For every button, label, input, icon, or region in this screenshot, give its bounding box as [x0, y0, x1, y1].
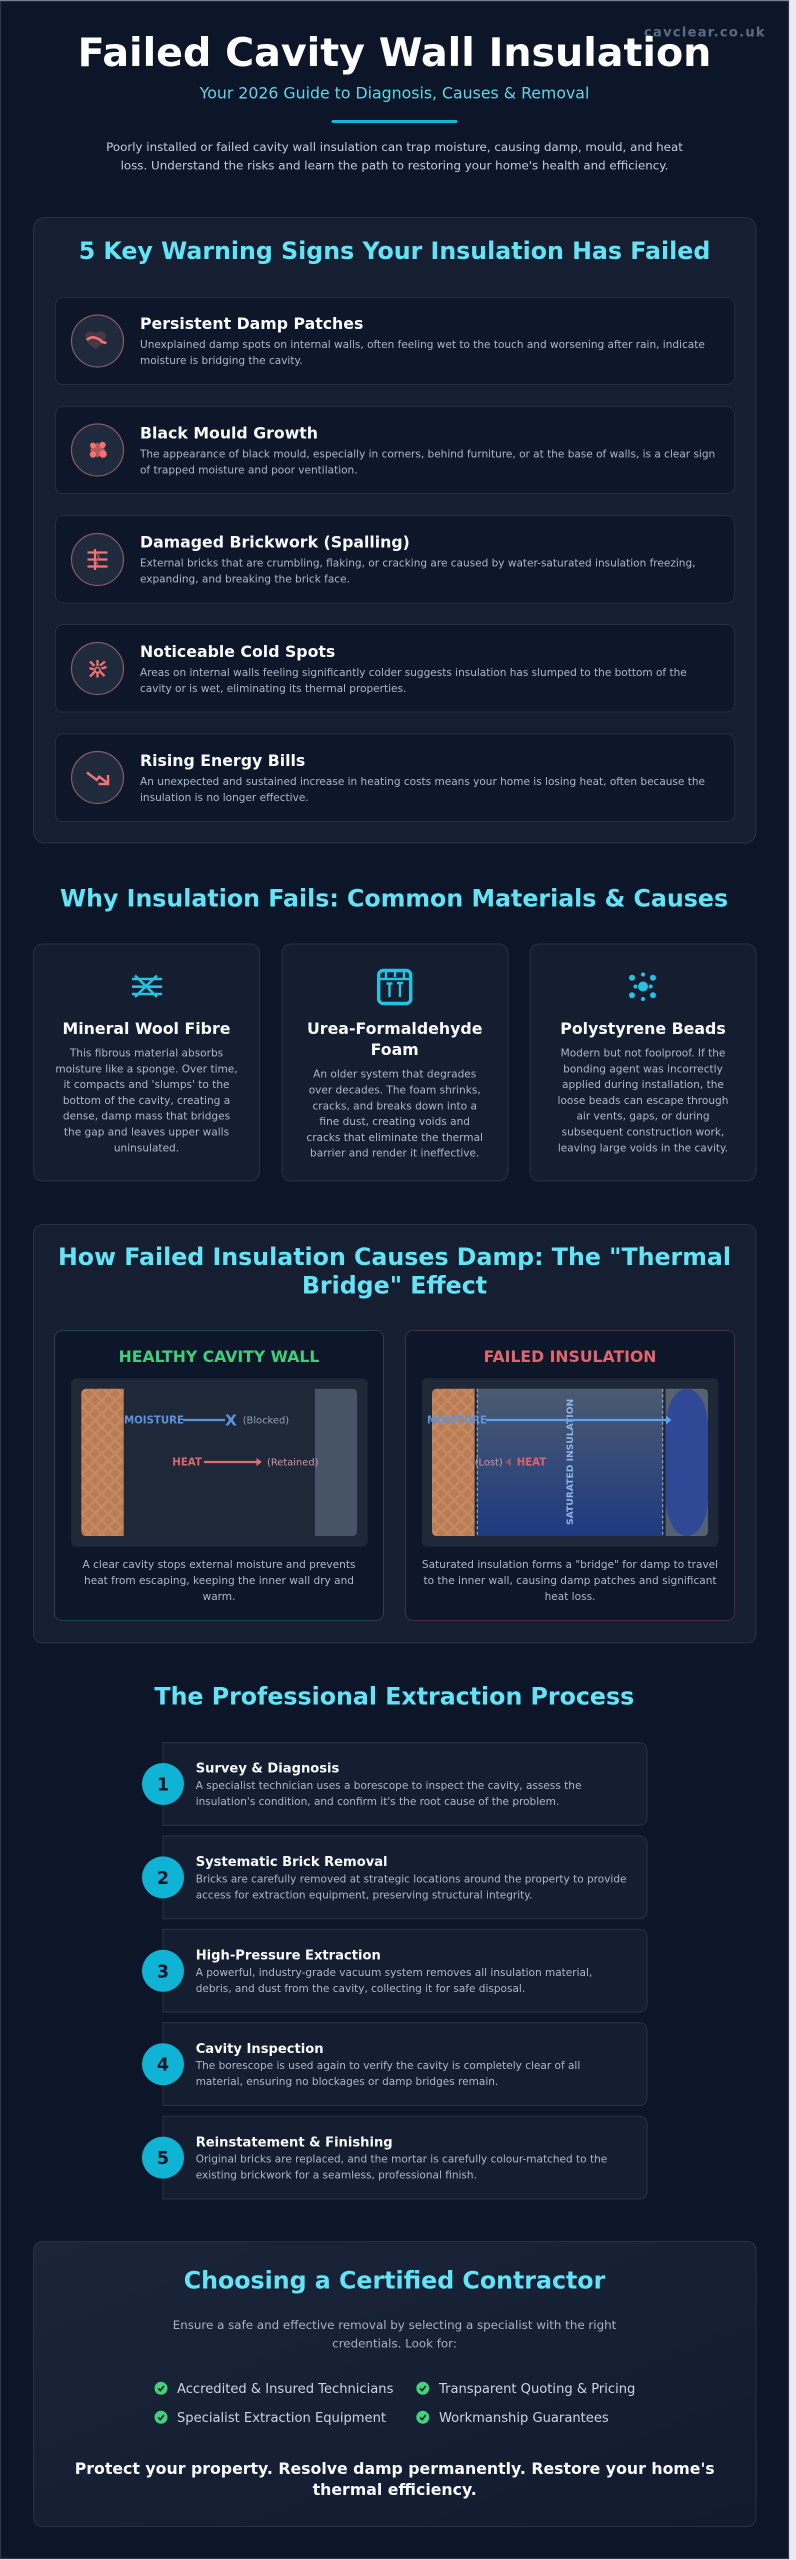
heat retained: HEAT — [172, 1458, 202, 1468]
panel: mineral wool fibre — [34, 944, 260, 1181]
text: mineral wool fibre: This fibrous material absorbs — [69, 1048, 223, 1060]
moisture blocked: X — [225, 1412, 237, 1430]
caption: healthy: warm. — [203, 1591, 235, 1603]
brick wall — [81, 1389, 124, 1536]
number badge 2 — [142, 1856, 184, 1898]
text: polystyrene beads: applied during installation, the — [562, 1079, 724, 1091]
number badge 1: 1 — [157, 1776, 169, 1796]
text: polystyrene beads: air vents, gaps, or during — [576, 1111, 710, 1123]
caption: healthy: heat from escaping, keeping the inner wall dry and — [84, 1575, 354, 1587]
text: urea-formaldehyde foam: Urea-Formaldehyde — [307, 1019, 482, 1038]
text: urea-formaldehyde foam — [306, 1019, 483, 1160]
text: step 5: Reinstatement & Finishing — [196, 2135, 393, 2150]
panel: warning signs — [34, 218, 756, 843]
heading: contractor: Choosing a Certified Contractor — [184, 2266, 606, 2294]
heat lost: HEAT — [517, 1458, 546, 1468]
saturated insulation — [477, 1389, 663, 1536]
step 2: Bricks are carefully removed at strategic locations around the property to provide — [196, 1873, 627, 1885]
panel: thermal bridge — [34, 1224, 756, 1643]
heat lost: (Lost) — [475, 1458, 503, 1468]
moisture passes: MOISTURE — [427, 1416, 487, 1426]
text: polystyrene beads — [558, 1019, 728, 1154]
panel: polystyrene beads — [530, 944, 756, 1181]
step 4: material, ensuring no blockages or damp bridges remain. — [196, 2076, 498, 2088]
card: cold spots: cavity or is wet, eliminating its thermal properties. — [140, 683, 406, 695]
card: rising energy bills: insulation is no longer effective. — [140, 792, 309, 804]
icon: cracked brick — [72, 534, 124, 586]
card: persistent damp patches: Unexplained damp spots on internal walls, often feeling wet to the touch and worsening after rain, indicate — [140, 339, 705, 351]
item: equipment: Specialist Extraction Equipment — [177, 2411, 386, 2426]
text: mineral wool fibre: Mineral Wool Fibre — [63, 1019, 230, 1038]
heading: warning signs: 5 Key Warning Signs Your Insulation Has Failed — [79, 237, 710, 265]
heading: extraction process: The Professional Extraction Process — [154, 1683, 634, 1711]
text: contractor intro: Ensure a safe and effective removal by selecting a specialist with the right — [173, 2318, 617, 2332]
number badge 5 — [142, 2137, 184, 2179]
step 4 — [142, 2023, 647, 2106]
step 1: A specialist technician uses a borescope to inspect the cavity, assess the — [196, 1780, 581, 1792]
number badge 4: 4 — [157, 2056, 169, 2076]
text: urea-formaldehyde foam: Foam — [371, 1040, 419, 1059]
text: mineral wool fibre: uninsulated. — [114, 1142, 179, 1154]
text: step 4: Cavity Inspection — [196, 2042, 324, 2057]
step 1: insulation's condition, and confirm it's the root cause of the problem. — [196, 1796, 559, 1808]
text: mineral wool fibre — [55, 1019, 238, 1154]
card: damaged brickwork: External bricks that are crumbling, flaking, or cracking are caused by water-saturated insulation freezing, — [140, 558, 695, 570]
text: urea-formaldehyde foam: cracks that eliminate the thermal — [306, 1132, 483, 1144]
card: black mould growth: The appearance of black mould, especially in corners, behind furniture, or at the base of walls, is a clear sign — [139, 448, 715, 460]
icon: cold burst — [72, 642, 124, 694]
card: failed insulation — [406, 1330, 734, 1620]
closing statement: Protect your property. Resolve damp permanently. Restore your home's — [75, 2459, 715, 2478]
card: cold spots: Areas on internal walls feeling significantly colder suggests insulation has slumped to the bottom of the — [140, 667, 687, 679]
card: damaged brickwork: expanding, and breaking the brick face. — [140, 574, 350, 586]
heading: thermal bridge: How Failed Insulation Causes Damp: The "Thermal — [58, 1243, 731, 1271]
number badge 1 — [142, 1763, 184, 1805]
text: polystyrene beads: leaving large voids in the cavity. — [558, 1142, 728, 1154]
text: polystyrene beads: subsequent construction work, — [562, 1126, 724, 1138]
text: step 1: Survey & Diagnosis — [196, 1762, 340, 1777]
heat lost — [475, 1458, 546, 1468]
moisture blocked: MOISTURE — [124, 1416, 184, 1426]
card: black mould growth: of trapped moisture and poor ventilation. — [140, 464, 358, 476]
number badge 3 — [142, 1950, 184, 1992]
intro paragraph: Poorly installed or failed cavity wall insulation can trap moisture, causing damp, mould, and heat — [106, 140, 683, 154]
panel: urea-formaldehyde foam — [282, 944, 508, 1181]
item: accredited: Accredited & Insured Technicians — [177, 2382, 394, 2397]
inner wall with damp — [666, 1389, 708, 1536]
step 5 — [142, 2116, 647, 2199]
checklist — [154, 2382, 635, 2426]
text: persistent damp patches: Persistent Damp Patches — [140, 314, 363, 333]
closing statement: thermal efficiency. — [313, 2480, 477, 2499]
card: persistent damp patches — [56, 298, 734, 384]
inner wall — [315, 1389, 357, 1536]
brick wall — [432, 1389, 475, 1536]
subtitle: Your 2026 Guide to Diagnosis, Causes & Removal — [199, 84, 589, 102]
heading: thermal bridge: Bridge" Effect — [302, 1272, 487, 1300]
heat retained — [172, 1458, 318, 1468]
step 1 — [142, 1743, 647, 1825]
step 3: A powerful, industry-grade vacuum system removes all insulation material, — [196, 1967, 592, 1979]
number badge 3: 3 — [157, 1962, 169, 1982]
text: polystyrene beads: bonding agent was incorrectly — [563, 1063, 723, 1075]
diagram: failed wall — [422, 1378, 718, 1547]
watermark: cavclear.co.uk — [644, 26, 766, 40]
text: mineral wool fibre: moisture like a sponge. Over time, — [55, 1063, 238, 1075]
step 3 — [142, 1929, 647, 2012]
icon: foam cavity — [379, 970, 411, 1004]
step 3: debris, and dust from the cavity, collecting it for safe disposal. — [196, 1983, 525, 1995]
text: mineral wool fibre: the gap and leaves upper walls — [64, 1126, 229, 1138]
step 5: existing brickwork for a seamless, professional finish. — [196, 2170, 477, 2182]
text: contractor intro: credentials. Look for: — [332, 2336, 457, 2350]
step 2 — [142, 1836, 647, 1919]
text: cold spots: Noticeable Cold Spots — [140, 642, 335, 661]
text: urea-formaldehyde foam: An older system that degrades — [313, 1069, 476, 1081]
text: rising energy bills: Rising Energy Bills — [140, 751, 305, 770]
caption: failed: to the inner wall, causing damp patches and significant — [423, 1575, 717, 1587]
text: polystyrene beads: loose beads can escape through — [558, 1095, 728, 1107]
text: black mould growth: Black Mould Growth — [140, 423, 318, 442]
text: mineral wool fibre: dense, damp mass that bridges — [63, 1111, 230, 1123]
number badge 5: 5 — [157, 2149, 169, 2169]
number badge 4 — [142, 2043, 184, 2085]
title: Failed Cavity Wall Insulation — [78, 30, 711, 76]
caption: healthy: A clear cavity stops external moisture and prevents — [83, 1559, 355, 1571]
text: urea-formaldehyde foam: fine dust, creating voids and — [319, 1116, 470, 1128]
accent rule — [332, 120, 458, 123]
icon: mould — [72, 424, 124, 476]
card: persistent damp patches: moisture is bridging the cavity. — [140, 355, 303, 367]
card: rising energy bills — [56, 734, 734, 822]
text: step 2: Systematic Brick Removal — [196, 1855, 388, 1870]
moisture passes — [427, 1416, 672, 1426]
card: black mould growth — [56, 406, 734, 494]
text: urea-formaldehyde foam: barrier and render it ineffective. — [310, 1148, 479, 1160]
label: healthy: HEALTHY CAVITY WALL — [119, 1347, 319, 1366]
text: damaged brickwork: Damaged Brickwork (Spalling) — [140, 533, 410, 552]
icon: fibres — [132, 976, 162, 997]
panel: certified contractor — [34, 2242, 756, 2526]
step 4: The borescope is used again to verify the cavity is completely clear of all — [195, 2060, 580, 2072]
text: urea-formaldehyde foam: cracks, and breaks down into a — [312, 1100, 477, 1112]
icon: damp patch — [72, 315, 124, 367]
text: mineral wool fibre: bottom of the cavity, creating a — [63, 1095, 230, 1107]
icon: beads — [629, 972, 656, 1001]
text: mineral wool fibre: it compacts and 'slumps' to the — [63, 1079, 230, 1091]
step 5: Original bricks are replaced, and the mortar is carefully colour-matched to the — [196, 2154, 607, 2166]
label: failed: FAILED INSULATION — [484, 1347, 656, 1366]
heat retained: (Retained) — [267, 1458, 318, 1468]
heading: why insulation fails: Why Insulation Fails: Common Materials & Causes — [60, 885, 728, 913]
number badge 2: 2 — [157, 1869, 169, 1889]
card: cold spots — [56, 624, 734, 712]
vertical label: SATURATED INSULATION — [565, 1399, 576, 1525]
text: polystyrene beads: Modern but not foolproof. If the — [561, 1048, 725, 1060]
item: guarantees: Workmanship Guarantees — [439, 2411, 609, 2426]
item: transparent: Transparent Quoting & Pricing — [438, 2382, 635, 2397]
caption: failed: heat loss. — [545, 1591, 595, 1603]
text: step 3: High-Pressure Extraction — [196, 1948, 381, 1964]
moisture blocked: (Blocked) — [243, 1416, 289, 1426]
moisture blocked — [124, 1412, 289, 1430]
card: damaged brickwork — [56, 516, 734, 603]
caption: failed: Saturated insulation forms a "bridge" for damp to travel — [422, 1559, 718, 1571]
card: rising energy bills: An unexpected and sustained increase in heating costs means your home is losing heat, often because the — [140, 776, 705, 788]
intro paragraph: loss. Understand the risks and learn the path to restoring your home's health and efficiency. — [121, 158, 668, 172]
step 2: access for extraction equipment, preserving structural integrity. — [196, 1889, 532, 1901]
icon: trend arrow — [72, 752, 124, 804]
card: healthy cavity wall — [54, 1330, 384, 1620]
text: polystyrene beads: Polystyrene Beads — [560, 1019, 726, 1038]
diagram: healthy wall — [71, 1378, 368, 1547]
header — [78, 30, 711, 172]
text: urea-formaldehyde foam: over decades. The foam shrinks, — [309, 1084, 481, 1096]
